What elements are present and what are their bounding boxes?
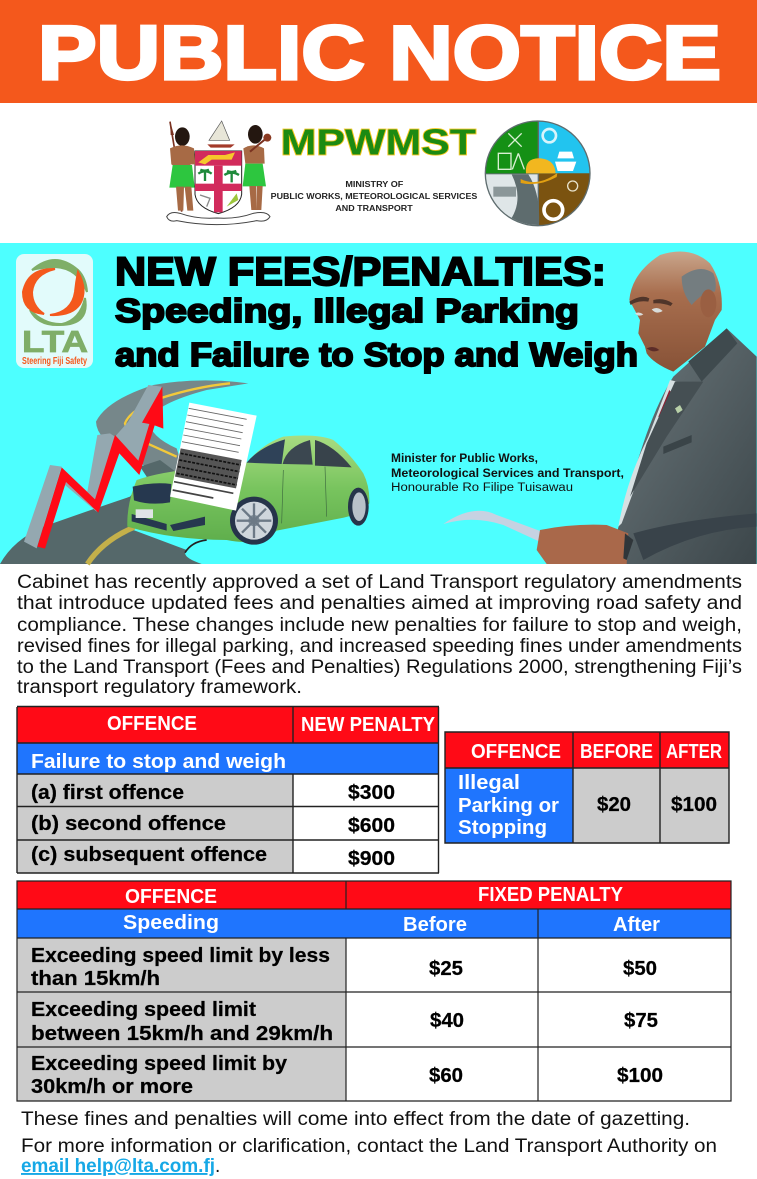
icon: ministry roundel xyxy=(484,120,591,226)
intro paragraph: to the Land Transport (Fees and Penalties) Regulations 2000, strengthening Fiji’s xyxy=(17,657,742,678)
table: speeding: Exceeding speed limit by xyxy=(31,1053,288,1075)
table: speeding: Exceeding speed limit by less xyxy=(31,945,330,967)
ministry logo row xyxy=(166,120,591,226)
icon: Fiji coat of arms xyxy=(167,121,271,225)
table: illegal parking: $20 xyxy=(597,794,631,816)
table: illegal parking: Illegal xyxy=(458,772,520,794)
MPWMST wordmark: MPWMST xyxy=(281,121,476,162)
road xyxy=(0,380,248,564)
icon: LTA logo: Steering Fiji Safety xyxy=(22,356,87,367)
table: speeding: Before xyxy=(403,914,467,936)
table: speeding: $25 xyxy=(429,958,463,980)
footer note xyxy=(21,1109,717,1177)
table: failure to stop and weigh: Failure to stop and weigh xyxy=(31,751,286,773)
heading: NEW FEES/PENALTIES: xyxy=(115,250,606,294)
table: illegal parking xyxy=(445,732,729,843)
table: illegal parking: $100 xyxy=(671,794,717,816)
intro paragraph: transport regulatory framework. xyxy=(17,677,302,698)
table: speeding: Speeding xyxy=(123,912,219,934)
minister caption: Meteorological Services and Transport, xyxy=(391,468,624,480)
footer note: . xyxy=(215,1156,220,1177)
table: speeding xyxy=(17,881,731,1101)
table: speeding: $40 xyxy=(430,1010,464,1032)
table: failure to stop and weigh: (a) first offence xyxy=(31,782,184,804)
minister caption: Minister for Public Works, xyxy=(391,453,538,465)
table: failure to stop and weigh: $300 xyxy=(348,782,395,804)
rising arrow xyxy=(24,385,163,549)
table: speeding: $100 xyxy=(617,1065,663,1087)
suit xyxy=(610,328,757,564)
table: speeding: $60 xyxy=(429,1065,463,1087)
table: failure to stop and weigh: $600 xyxy=(348,815,395,837)
table: speeding: Exceeding speed limit xyxy=(31,999,256,1021)
table: illegal parking: AFTER xyxy=(666,741,722,763)
table: speeding: OFFENCE xyxy=(125,886,217,908)
table: speeding: $75 xyxy=(624,1010,658,1032)
heading: Speeding, Illegal Parking xyxy=(115,292,579,329)
illustration: road, arrow and car xyxy=(0,380,369,564)
document xyxy=(170,403,257,511)
table: speeding: 30km/h or more xyxy=(31,1076,193,1098)
minister caption: Honourable Ro Filipe Tuisawau xyxy=(391,482,573,494)
intro paragraph xyxy=(17,572,742,698)
title banner: PUBLIC NOTICE xyxy=(38,11,721,96)
table: failure to stop and weigh: NEW PENALTY xyxy=(301,714,436,736)
ministry name: AND TRANSPORT xyxy=(335,204,413,213)
table: failure to stop and weigh: $900 xyxy=(348,848,395,870)
intro paragraph: revised fines for illegal parking, and increased speeding fines under amendments xyxy=(17,636,742,657)
table: speeding: After xyxy=(613,914,660,936)
table: speeding: between 15km/h and 29km/h xyxy=(31,1023,333,1045)
table: illegal parking: Stopping xyxy=(458,817,547,839)
ministry name xyxy=(271,180,478,213)
heading: and Failure to Stop and Weigh xyxy=(115,336,638,373)
table: illegal parking: OFFENCE xyxy=(471,741,561,763)
intro paragraph: compliance. These changes include new penalties for failure to stop and weigh, xyxy=(17,615,742,636)
title banner xyxy=(0,0,757,103)
icon: LTA logo xyxy=(16,254,93,368)
hero banner xyxy=(0,243,757,564)
table: illegal parking: BEFORE xyxy=(580,741,653,763)
footer note: email help@lta.com.fj xyxy=(21,1156,215,1177)
table: speeding: $50 xyxy=(623,958,657,980)
heading xyxy=(115,250,638,373)
intro paragraph: Cabinet has recently approved a set of Land Transport regulatory amendments xyxy=(17,572,742,593)
table: failure to stop and weigh: (c) subsequent offence xyxy=(31,844,267,866)
table: failure to stop and weigh xyxy=(17,706,439,873)
icon: LTA logo: LTA xyxy=(22,324,88,359)
table: failure to stop and weigh: (b) second offence xyxy=(31,813,226,835)
hands and paper xyxy=(443,511,547,543)
ministry name: PUBLIC WORKS, METEOROLOGICAL SERVICES xyxy=(271,192,478,201)
minister photo xyxy=(443,251,757,564)
footer note: These fines and penalties will come into effect from the date of gazetting. xyxy=(21,1109,690,1130)
footer note: For more information or clarification, contact the Land Transport Authority on xyxy=(21,1136,717,1157)
table: speeding: than 15km/h xyxy=(31,968,160,990)
table: speeding: FIXED PENALTY xyxy=(478,884,624,906)
head xyxy=(629,251,722,372)
intro paragraph: that introduce updated fees and penalties aimed at improving road safety and xyxy=(17,593,742,614)
ministry name: MINISTRY OF xyxy=(345,180,403,189)
minister caption xyxy=(391,453,624,494)
table: illegal parking: Parking or xyxy=(458,795,559,817)
table: failure to stop and weigh: OFFENCE xyxy=(107,713,197,735)
car xyxy=(127,436,369,553)
